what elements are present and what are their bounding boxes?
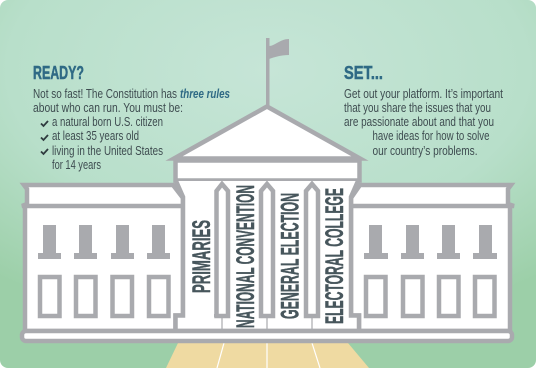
left wing — [22, 185, 183, 331]
set line 5: our country’s problems. — [372, 143, 478, 158]
label: primaries: PRIMARIES — [189, 220, 216, 293]
upper windows left — [38, 225, 170, 259]
set line 3: are passionate about and that you — [344, 114, 494, 129]
pediment — [174, 106, 360, 158]
rule 3: living in the United States — [52, 143, 163, 158]
heading: ready: READY? — [33, 63, 84, 83]
flag — [266, 38, 289, 106]
rule 1: a natural born U.S. citizen — [52, 114, 163, 129]
upper windows right — [364, 225, 497, 259]
rule 3 continued: for 14 years — [52, 157, 101, 172]
column 3 — [306, 184, 318, 316]
intro line 2: about who can run. You must be: — [33, 100, 183, 115]
column 2 — [261, 184, 273, 316]
intro line 1: Not so fast! The Constitution has — [33, 86, 177, 101]
right wing cornice — [351, 204, 510, 208]
frieze — [176, 160, 360, 180]
text block: ready — [33, 63, 230, 172]
text: NATIONAL CONVENTION — [233, 185, 260, 328]
lower windows right — [366, 277, 494, 316]
heading: set: SET... — [344, 63, 383, 83]
right wing — [351, 185, 514, 331]
text: ELECTORAL COLLEGE — [322, 188, 349, 324]
set line 2: that you share the issues that you — [344, 100, 491, 115]
label: general election: GENERAL ELECTION — [278, 193, 304, 319]
rule 2: at least 35 years old — [52, 128, 139, 143]
emphasis: three rules: three rules — [180, 86, 230, 101]
set line 4: have ideas for how to solve — [372, 128, 490, 143]
center block — [176, 181, 359, 331]
capitol building — [22, 106, 514, 341]
icon: check marks — [41, 121, 48, 154]
road — [166, 343, 369, 368]
lower windows left — [40, 277, 168, 316]
base — [22, 331, 512, 341]
text block: set — [344, 63, 503, 158]
left wing cornice — [25, 204, 183, 208]
column 1 — [216, 184, 228, 316]
